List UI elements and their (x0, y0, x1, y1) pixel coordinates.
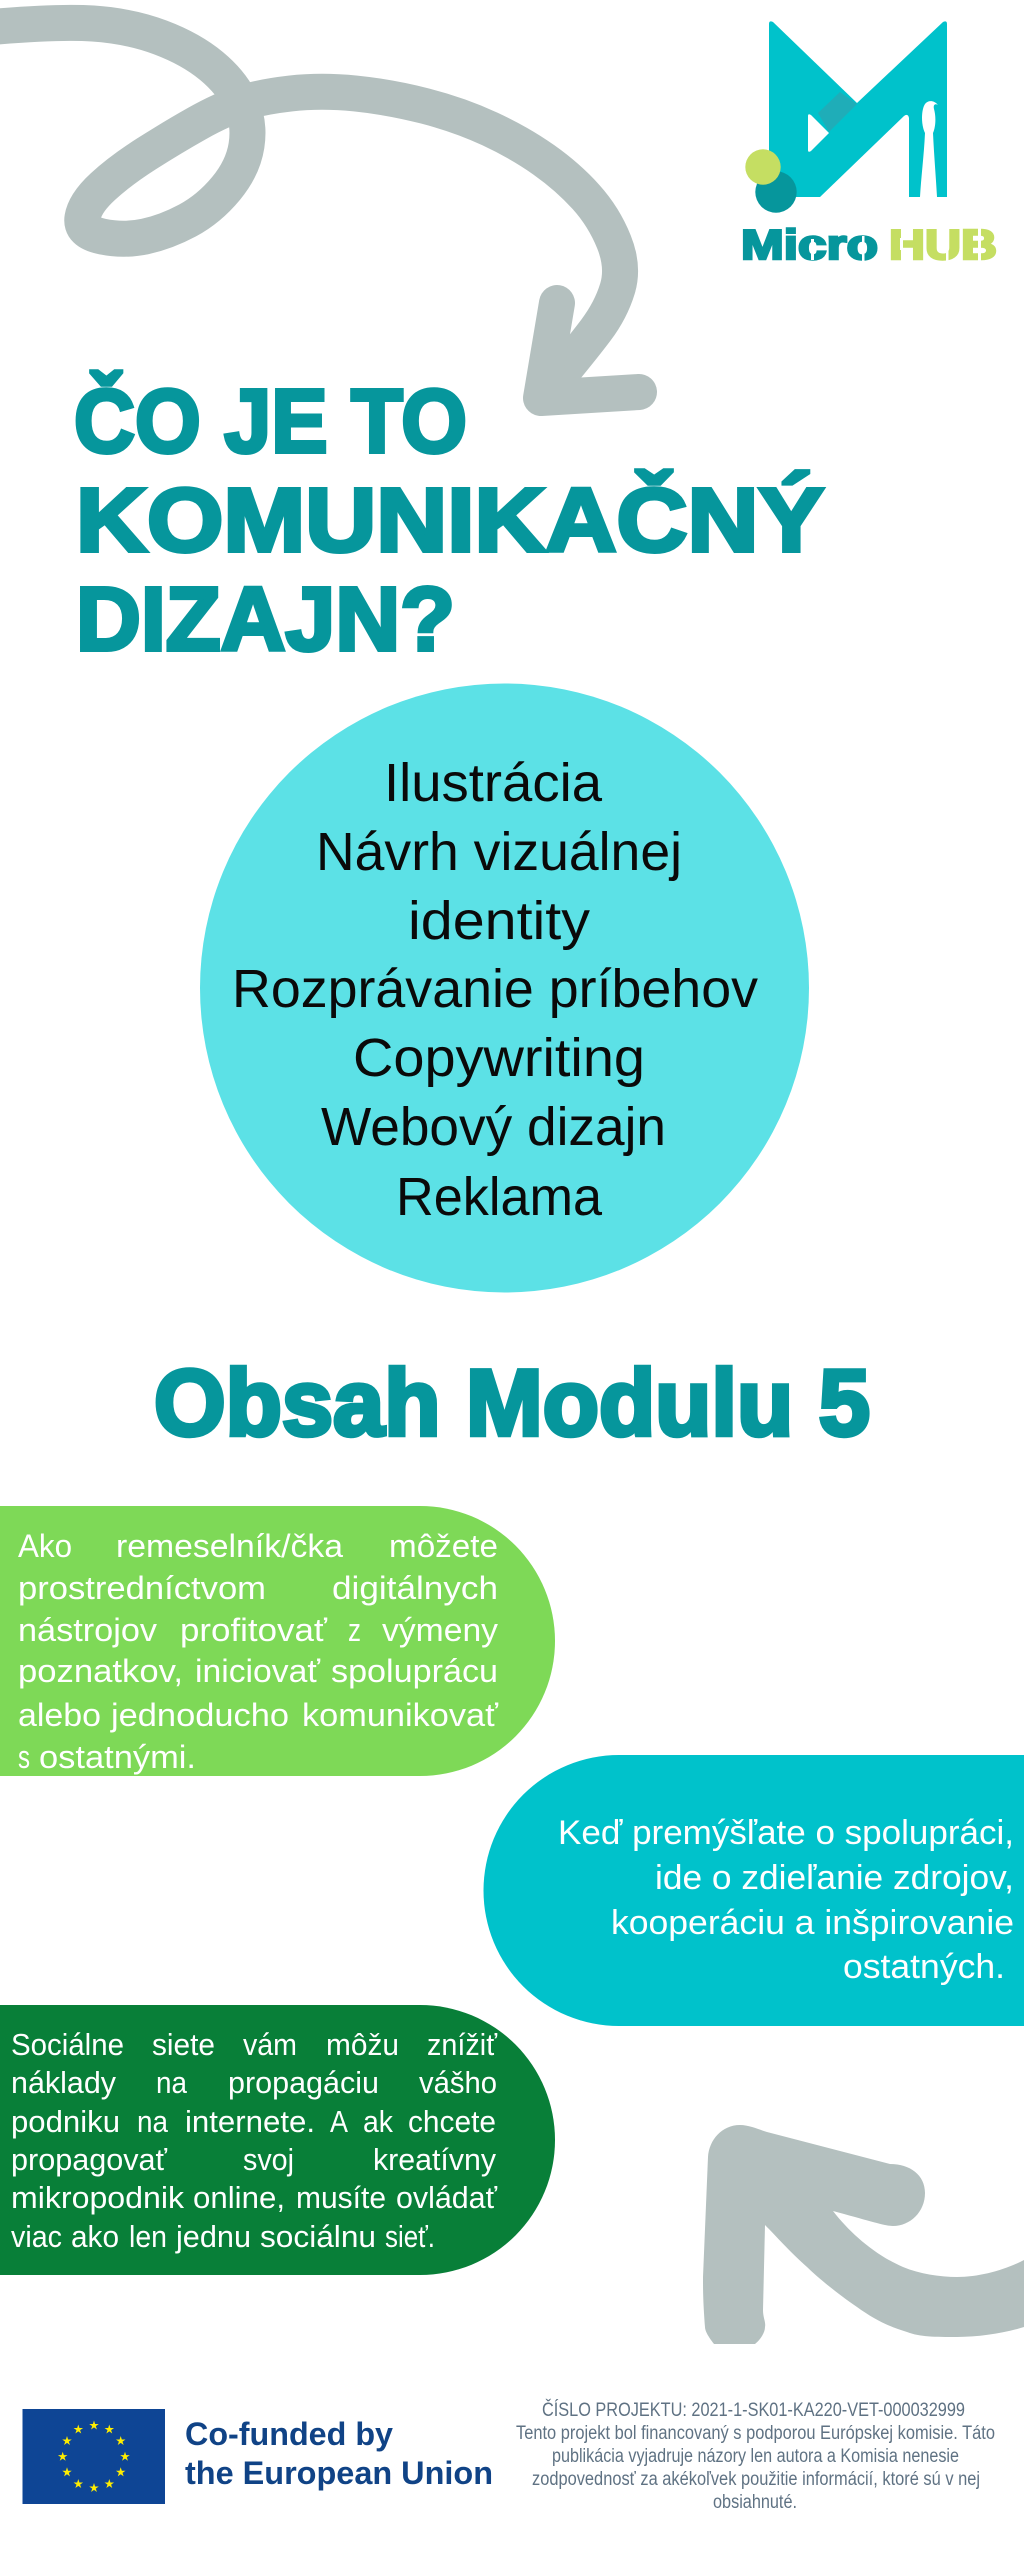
footer disclaimer text: ČÍSLO PROJEKTU: 2021-1-SK01-KA220-VET-000032999 (542, 2399, 965, 2421)
icon: EU flag (22, 2409, 165, 2504)
pill text 1: digitálnych (332, 1570, 498, 1606)
logo dark band (818, 92, 857, 132)
pill text 1: alebo (18, 1697, 101, 1733)
pill text 1: iniciovať (195, 1653, 321, 1689)
EU co-funded text: the European Union (185, 2455, 493, 2491)
pill text 3: Sociálne (11, 2027, 124, 2062)
icon: curly arrow top (0, 23, 639, 398)
pill text 3: chcete (408, 2104, 496, 2139)
pill text 3: jednu (175, 2219, 251, 2254)
list of topics: Reklama (396, 1167, 603, 1227)
logo brush (920, 101, 938, 197)
pill text 1: jednoducho (110, 1697, 289, 1733)
list of topics: identity (408, 891, 590, 951)
pill text 1: Ako (18, 1528, 72, 1564)
pill text 1: remeselník/čka (116, 1528, 343, 1564)
pill text 3: online, (193, 2180, 285, 2215)
pill text 1: prostredníctvom (18, 1570, 266, 1606)
footer disclaimer text (516, 2399, 995, 2513)
pill text 2 (558, 1814, 1014, 1986)
pill text 3: kreatívny (373, 2142, 496, 2177)
list of topics: Ilustrácia (384, 753, 603, 813)
title: DIZAJN? (76, 570, 455, 670)
pill text 3: mikropodnik (11, 2180, 185, 2215)
pill text 1: z (348, 1612, 361, 1648)
heading: Obsah Modulu 5: Obsah Modulu 5 (154, 1350, 870, 1455)
panel: cyan pill (484, 1755, 1024, 2026)
list of topics: Copywriting (353, 1028, 645, 1088)
list of topics: Webový dizajn (321, 1097, 666, 1157)
pill text 1: ostatnými. (39, 1739, 196, 1775)
pill text 3: internete. (185, 2104, 315, 2139)
EU logo (22, 2409, 493, 2504)
pill text 3 (11, 2027, 497, 2254)
footer disclaimer text: obsiahnuté. (713, 2492, 797, 2513)
logo mark M (769, 21, 947, 197)
pill text 1: komunikovať (302, 1697, 499, 1733)
pill text 1: nástrojov (18, 1612, 157, 1648)
pill text 3: vášho (419, 2065, 497, 2100)
icon: arrow bottom (703, 2125, 1024, 2344)
pill text 3: môžu (326, 2027, 399, 2062)
pill text 3: sieť. (385, 2219, 435, 2254)
pill text 3: na (156, 2065, 188, 2100)
pill text 3: propagovať (11, 2142, 167, 2177)
pill text 3: siete (152, 2027, 215, 2062)
pill text 2: ide o zdieľanie zdrojov, (655, 1859, 1014, 1897)
pill text 3: propagáciu (228, 2065, 379, 2100)
pill text 3: viac (11, 2219, 62, 2254)
pill text 3: A (330, 2104, 348, 2139)
pill text 3: náklady (11, 2065, 116, 2100)
title: KOMUNIKAČNÝ (76, 469, 824, 571)
logo lime circle (745, 149, 781, 185)
panel: circle with list (200, 684, 809, 1292)
pill text 1 (18, 1528, 499, 1775)
pill text 3: sociálnu (260, 2219, 376, 2254)
pill text 1: výmeny (382, 1612, 498, 1648)
pill text 3: svoj (243, 2142, 294, 2177)
pill text 3: na (137, 2104, 169, 2139)
pill text 1: poznatkov, (18, 1653, 183, 1689)
EU co-funded text (185, 2416, 493, 2491)
pill text 3: vám (243, 2027, 297, 2062)
logo text HUB: HUB (889, 221, 997, 268)
list of topics: Návrh vizuálnej (316, 822, 682, 882)
pill text 3: ako (71, 2219, 119, 2254)
pill text 3: musíte (296, 2180, 386, 2215)
pill text 3: len (129, 2219, 167, 2254)
EU co-funded text: Co-funded by (185, 2416, 393, 2452)
pill text 3: ak (363, 2104, 393, 2139)
pill text 1: môžete (389, 1528, 498, 1564)
pill text 1: s (18, 1739, 30, 1775)
list of topics: Rozprávanie príbehov (232, 959, 758, 1019)
pill text 1: spoluprácu (331, 1653, 498, 1689)
pill text 3: podniku (11, 2104, 120, 2139)
title (74, 370, 824, 670)
logo dark circle (755, 171, 797, 213)
title: ČO JE TO (74, 370, 467, 472)
panel: dark green pill (0, 2005, 555, 2275)
logo: MicroHUB (741, 21, 997, 268)
logo text Micro: Micro (741, 221, 878, 268)
pill text 2: kooperáciu a inšpirovanie (611, 1904, 1014, 1942)
logo stencil cuts (811, 226, 981, 261)
pill text 2: Keď premýšľate o spolupráci, (558, 1814, 1014, 1852)
pill text 2: ostatných. (843, 1948, 1005, 1986)
footer disclaimer text: publikácia vyjadruje názory len autora a Komisia nenesie (552, 2446, 959, 2467)
panel: light green pill (0, 1506, 555, 1776)
list of topics (232, 753, 758, 1227)
logo triangle cutout (808, 114, 829, 152)
pill text 1: profitovať (180, 1612, 328, 1648)
pill text 3: znížiť (427, 2027, 497, 2062)
pill text 3: ovládať (396, 2180, 497, 2215)
